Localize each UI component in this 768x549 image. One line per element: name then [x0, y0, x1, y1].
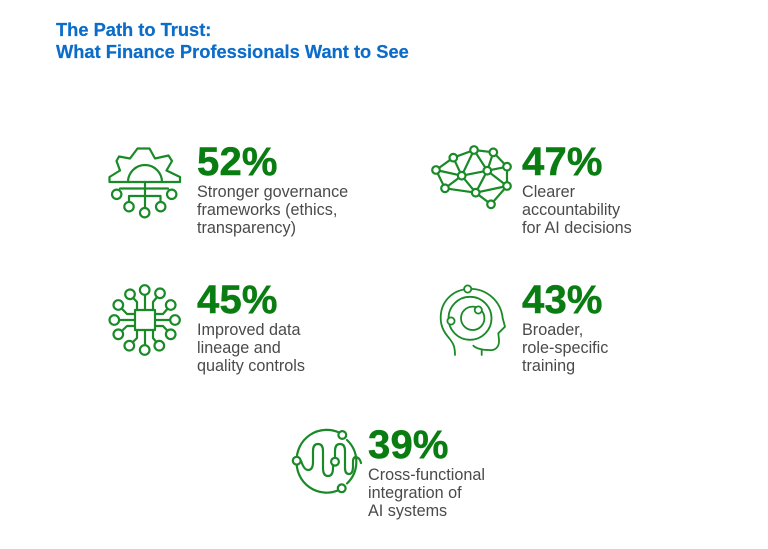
text: accountability: accountability [522, 201, 620, 219]
text: governance: transparency) [197, 219, 296, 237]
text: integration [368, 466, 485, 520]
icon: data chip [110, 285, 180, 355]
text: accountability: Clearer [522, 183, 575, 201]
stat: 39%: 39% [368, 423, 449, 467]
text: integration: AI systems [368, 502, 447, 520]
text: accountability [522, 183, 632, 237]
stat: 47%: 47% [522, 140, 603, 184]
text: governance: frameworks (ethics, [197, 201, 337, 219]
text: training: role-specific [522, 339, 608, 357]
text: data lineage: quality controls [197, 357, 305, 375]
icon: head with rings [441, 285, 505, 355]
icon: gear governance [110, 148, 180, 217]
text: training: Broader, [522, 321, 583, 339]
stat: 43%: 43% [522, 278, 603, 322]
icon: brain network [432, 146, 511, 208]
text: data lineage: Improved data [197, 321, 300, 339]
stat: 45%: 45% [197, 278, 278, 322]
text: governance: Stronger governance [197, 183, 348, 201]
text: data lineage: lineage and [197, 339, 281, 357]
text: training: training [522, 357, 575, 375]
text: training [522, 321, 608, 375]
title [56, 19, 409, 62]
stat: 52%: 52% [197, 140, 278, 184]
text: accountability: for AI decisions [522, 219, 632, 237]
title: What Finance Professionals Want to See [56, 41, 409, 62]
title: The Path to Trust: [56, 19, 211, 40]
text: integration: integration of [368, 484, 462, 502]
icon: signal wave [293, 430, 361, 493]
text: integration: Cross-functional [368, 466, 485, 484]
text: data lineage [197, 321, 305, 375]
text: governance [197, 183, 348, 237]
